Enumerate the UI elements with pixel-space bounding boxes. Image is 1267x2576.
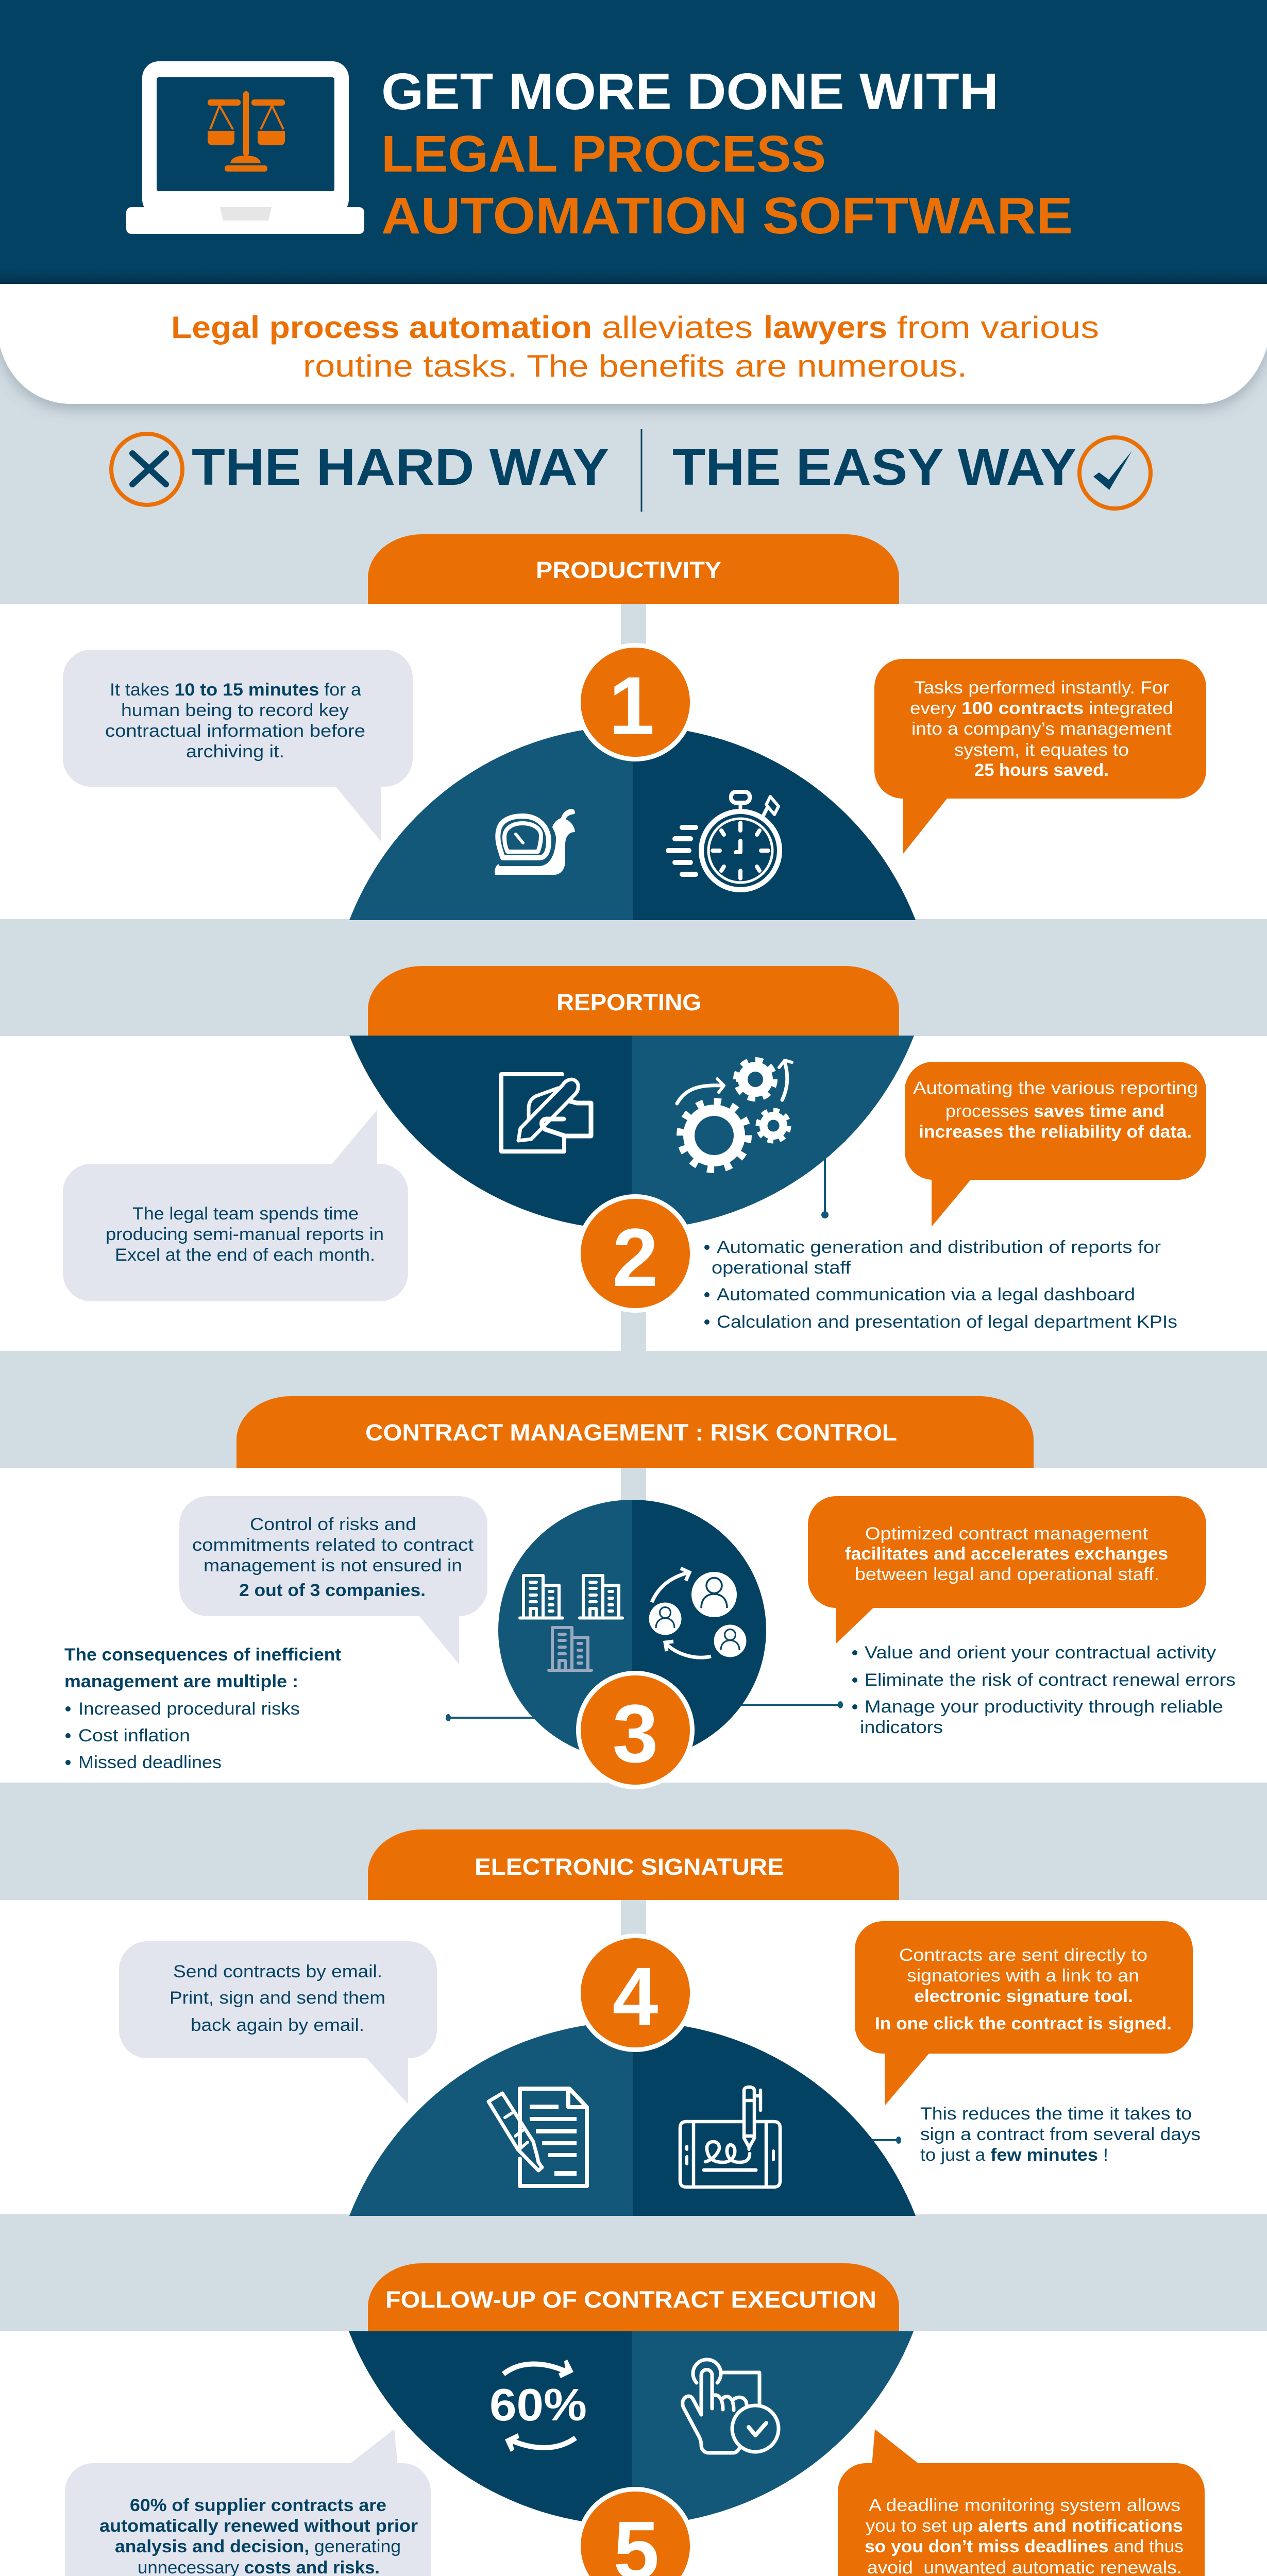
callout: easy way productivity: every 100 contracts integrated (910, 699, 1173, 718)
callout: hard way reporting: producing semi-manual reports in (106, 1225, 384, 1244)
heading: reporting (368, 966, 899, 1036)
callout: easy way contract management: Optimized contract management (865, 1524, 1148, 1544)
bullet list: reporting benefits: Automated communication via a legal dashboard (717, 1285, 1135, 1304)
callout: hard way reporting (63, 1110, 408, 1301)
callout: hard way productivity (63, 650, 413, 841)
panel: contract management (64, 1396, 1236, 1789)
icon: document and pen (501, 1074, 591, 1151)
title (381, 63, 1073, 245)
text block: consequences (64, 1645, 341, 1772)
icon: cross in circle (111, 434, 182, 505)
bullet list: reporting benefits: Automatic generation and distribution of reports for (717, 1238, 1161, 1257)
callout: easy way reporting: processes saves time and (945, 1101, 1164, 1121)
text block: consequences: Cost inflation (78, 1726, 190, 1745)
callout: easy way follow-up: so you don’t miss deadlines and thus (865, 2537, 1184, 2556)
hard way / easy way heading (111, 429, 1151, 512)
callout: easy way follow-up: you to set up alerts and notifications (866, 2516, 1183, 2536)
callout: easy way productivity: Tasks performed instantly. For (914, 678, 1169, 698)
callout: easy way follow-up: A deadline monitoring system allows (869, 2496, 1180, 2515)
icon: gears (677, 1060, 792, 1170)
callout: hard way reporting: The legal team spends time (132, 1204, 359, 1224)
number 4: 4 (613, 1950, 658, 2042)
panel: productivity (63, 534, 1206, 920)
icon: buildings (518, 1575, 624, 1672)
callout: easy way signature (855, 1921, 1193, 2106)
heading: the hard way: THE HARD WAY (192, 438, 609, 496)
callout: easy way productivity (874, 659, 1206, 854)
callout: easy way productivity: into a company’s management (911, 719, 1172, 739)
callout: easy way contract management: facilitates and accelerates exchanges (845, 1544, 1168, 1564)
callout: easy way reporting: increases the reliability of data. (919, 1122, 1192, 1142)
callout: hard way productivity: contractual information before (105, 721, 365, 741)
callout: hard way contract management: 2 out of 3 companies. (239, 1581, 426, 1600)
title: AUTOMATION SOFTWARE (381, 187, 1073, 245)
heading: reporting: REPORTING (556, 989, 701, 1015)
intro text: from various (897, 310, 1099, 345)
callout: hard way productivity: archiving it. (186, 742, 284, 761)
heading: electronic signature (368, 1829, 899, 1900)
callout: hard way follow-up: automatically renewed without prior (99, 2516, 418, 2536)
bullet list: contract management benefits: Manage your productivity through reliable (865, 1697, 1223, 1717)
header (0, 0, 1267, 284)
callout: hard way productivity: It takes 10 to 15 minutes for a (110, 680, 361, 700)
bullet list: reporting benefits (704, 1238, 1177, 1332)
text block: signature time saving: This reduces the time it takes to (920, 2104, 1192, 2124)
text block: consequences: Increased procedural risks (78, 1699, 300, 1719)
intro banner (0, 278, 1267, 404)
text block: consequences: management are multiple : (64, 1672, 298, 1691)
title: GET MORE DONE WITH (381, 63, 999, 121)
number 3: 3 (613, 1687, 658, 1780)
heading: the easy way: THE EASY WAY (672, 438, 1076, 496)
heading: productivity (368, 534, 899, 604)
text block: signature time saving (920, 2104, 1201, 2165)
callout: hard way contract management: commitments related to contract (192, 1535, 474, 1555)
panel: follow-up of contract execution (65, 2263, 1205, 2576)
heading: productivity: PRODUCTIVITY (536, 557, 721, 583)
callout: hard way signature: back again by email. (191, 2015, 364, 2035)
title: LEGAL PROCESS (381, 125, 826, 183)
callout: hard way signature: Send contracts by email. (173, 1962, 382, 1981)
panel: electronic signature (119, 1829, 1201, 2216)
icon: people exchange (649, 1568, 746, 1657)
callout: hard way contract management: management is not ensured in (204, 1556, 462, 1575)
icon: stopwatch (666, 792, 780, 890)
callout: easy way reporting (905, 1062, 1206, 1227)
callout: easy way contract management (808, 1496, 1206, 1644)
callout: hard way reporting: Excel at the end of each month. (115, 1245, 375, 1265)
panel: reporting (63, 966, 1206, 1351)
callout: easy way productivity: 25 hours saved. (974, 760, 1109, 780)
icon: document and pen (488, 2089, 587, 2186)
dome (349, 2331, 914, 2526)
number 1 (576, 643, 695, 761)
dome (349, 1036, 914, 1230)
callout: easy way reporting: Automating the various reporting (913, 1078, 1198, 1098)
icon: snail (495, 809, 575, 875)
heading: follow-up: FOLLOW-UP OF CONTRACT EXECUTION (385, 2286, 876, 2313)
icon: tablet signature (680, 2087, 780, 2187)
bullet list: contract management benefits: Value and orient your contractual activity (865, 1643, 1216, 1663)
number 3 (576, 1671, 695, 1789)
dome (349, 726, 916, 920)
heading: electronic signature: ELECTRONIC SIGNATURE (475, 1854, 784, 1880)
icon: laptop with scales (126, 61, 364, 234)
callout: hard way follow-up: analysis and decision, generating (115, 2537, 401, 2556)
number 2: 2 (613, 1211, 658, 1303)
callout: easy way signature: In one click the contract is signed. (875, 2014, 1172, 2033)
text block: signature time saving: sign a contract from several days (920, 2125, 1201, 2144)
dome (349, 2022, 916, 2216)
callout: easy way signature: signatories with a link to an (907, 1966, 1139, 1986)
intro text: lawyers (764, 310, 887, 345)
callout: easy way contract management: between legal and operational staff. (855, 1565, 1159, 1584)
icon: 60 percent renewal (489, 2360, 587, 2452)
heading: contract management (236, 1396, 1034, 1468)
intro text (171, 310, 1099, 383)
intro text: Legal process automation (171, 310, 592, 345)
callout: easy way productivity: system, it equates to (954, 740, 1129, 760)
number 4 (576, 1934, 695, 2052)
bullet list: contract management benefits: Eliminate the risk of contract renewal errors (865, 1670, 1236, 1690)
number 1: 1 (609, 659, 654, 752)
icon: check in circle (1079, 437, 1151, 509)
icon: hand touch and check (683, 2360, 779, 2453)
bullet list: contract management benefits: indicators (860, 1718, 943, 1737)
icon: 60 percent renewal: 60% (489, 2379, 587, 2430)
callout: hard way signature: Print, sign and send them (170, 1988, 385, 2008)
callout: easy way signature: Contracts are sent directly to (899, 1945, 1147, 1965)
heading: follow-up (368, 2263, 899, 2331)
circle (498, 1500, 766, 1760)
callout: easy way follow-up (838, 2429, 1205, 2576)
text block: consequences: Missed deadlines (78, 1753, 222, 1772)
bullet list: contract management benefits (852, 1643, 1236, 1737)
callout: hard way contract management (179, 1496, 487, 1664)
number 5 (576, 2487, 695, 2576)
callout: hard way signature (119, 1941, 437, 2104)
callout: hard way contract management: Control of risks and (250, 1515, 416, 1534)
heading: contract management: CONTRACT MANAGEMENT : RISK CONTROL (365, 1419, 897, 1446)
callout: hard way follow-up: 60% of supplier contracts are (130, 2496, 386, 2515)
bullet list: reporting benefits: Calculation and presentation of legal department KPIs (717, 1312, 1177, 1332)
callout: hard way follow-up (65, 2429, 431, 2576)
callout: easy way signature: electronic signature tool. (914, 1987, 1133, 2006)
text block: signature time saving: to just a few minutes ! (920, 2145, 1108, 2165)
intro text: alleviates (602, 310, 753, 345)
bullet list: reporting benefits: operational staff (712, 1258, 851, 1278)
callout: hard way productivity: human being to record key (121, 701, 349, 720)
intro text: routine tasks. The benefits are numerous. (303, 349, 967, 383)
text block: consequences: The consequences of inefficient (64, 1645, 341, 1665)
number 2 (576, 1194, 695, 1313)
